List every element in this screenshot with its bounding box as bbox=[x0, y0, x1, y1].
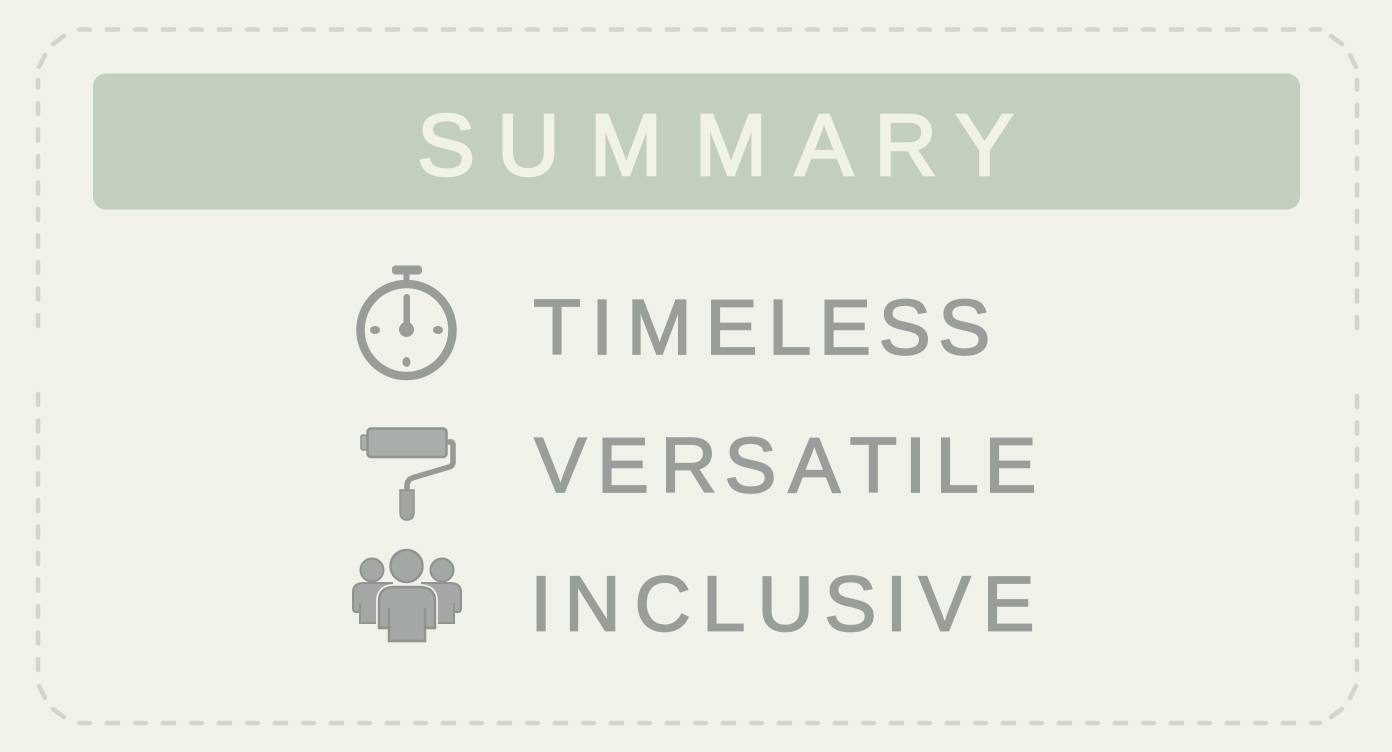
label: timeless: TIMELESS bbox=[533, 283, 990, 371]
icon: group of people bbox=[353, 550, 461, 641]
label: inclusive: INCLUSIVE bbox=[530, 559, 1035, 647]
icon: paint roller bbox=[361, 428, 453, 520]
row: versatile bbox=[361, 421, 1037, 520]
label: versatile: VERSATILE bbox=[534, 421, 1037, 509]
row: inclusive bbox=[353, 550, 1035, 647]
title banner bbox=[93, 74, 1300, 210]
icon: stopwatch bbox=[360, 266, 452, 376]
row: timeless bbox=[360, 266, 990, 376]
title: SUMMARY bbox=[417, 97, 1014, 194]
